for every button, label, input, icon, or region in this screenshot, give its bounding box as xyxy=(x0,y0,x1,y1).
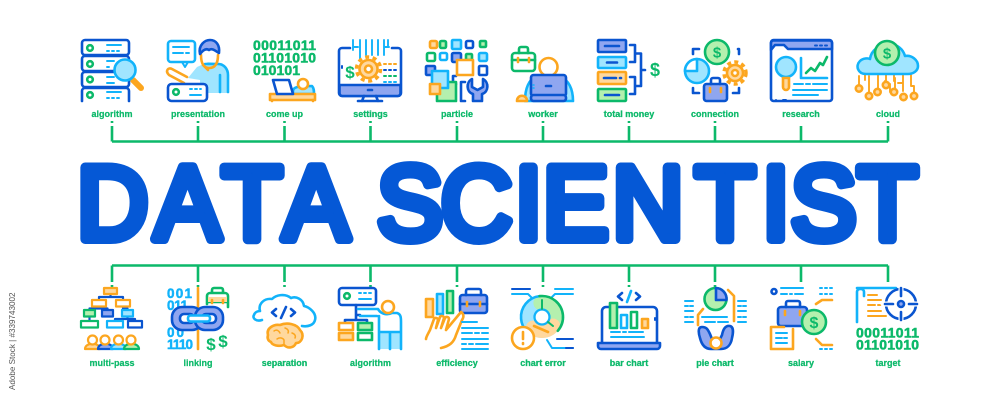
icon: bar chart laptop xyxy=(598,291,660,349)
label: worker: worker xyxy=(527,109,558,119)
icon: connection xyxy=(685,40,746,101)
icon: pie chart person xyxy=(685,288,746,349)
icon: total money stacks xyxy=(598,40,660,101)
icon: connection: $ xyxy=(713,44,722,62)
icon: presentation person xyxy=(167,40,228,101)
icon: salary briefcase: $ xyxy=(810,315,819,332)
label: target: target xyxy=(875,358,901,368)
icon: research window xyxy=(771,40,832,101)
icon: come up binary and laptop: 00011011 xyxy=(253,37,316,53)
label: linking: linking xyxy=(184,358,212,368)
icon: cloud: $ xyxy=(883,46,892,62)
icon: target scroll: 01101010 xyxy=(856,336,919,352)
label: cloud: cloud xyxy=(876,109,900,119)
icon: come up binary and laptop: 01101010 xyxy=(253,50,316,66)
label: presentation: presentation xyxy=(171,109,225,119)
icon: salary briefcase xyxy=(771,288,832,349)
label: particle: particle xyxy=(441,109,473,119)
icon: chart error donut xyxy=(512,289,573,349)
label: pie chart: pie chart xyxy=(696,358,734,368)
icon: multi-pass tree xyxy=(81,288,142,349)
icon: linking chain: $ xyxy=(218,332,228,351)
icon: algorithm person xyxy=(339,288,401,349)
icon: linking chain: 001 xyxy=(167,286,192,301)
watermark id: Adobe Stock | #339743002 xyxy=(8,292,17,390)
label: separation: separation xyxy=(262,358,307,368)
label: algorithm: algorithm xyxy=(350,358,391,368)
icon: linking chain xyxy=(167,286,228,354)
label: multi-pass: multi-pass xyxy=(89,358,135,368)
icon: settings monitor xyxy=(339,40,401,101)
label: research: research xyxy=(782,109,820,119)
icon: come up binary and laptop: 010101 xyxy=(253,62,300,78)
top connector xyxy=(112,121,888,142)
icon: linking chain: 1110 xyxy=(167,337,193,352)
label: come up: come up xyxy=(266,109,304,119)
icon: linking chain: 00 xyxy=(167,325,184,340)
icon: separation cloud and brain xyxy=(253,295,315,347)
icon: algorithm server xyxy=(82,40,141,101)
title: DATA SCIENTIST xyxy=(77,146,918,262)
bottom connector xyxy=(112,266,888,287)
icon: target scroll: 00011011 xyxy=(856,324,919,340)
label: bar chart: bar chart xyxy=(610,358,648,368)
label: connection: connection xyxy=(691,109,739,119)
icon: linking chain: $ xyxy=(206,335,216,354)
label: chart error: chart error xyxy=(520,358,566,368)
icon: target scroll xyxy=(856,286,919,352)
icon: linking chain: 011 xyxy=(167,298,188,313)
icon: total money stacks: $ xyxy=(650,60,660,80)
icon: settings monitor: $ xyxy=(345,63,355,82)
label: settings: settings xyxy=(353,109,388,119)
label: salary: salary xyxy=(788,358,814,368)
icon: particle grid xyxy=(426,40,487,101)
label: algorithm: algorithm xyxy=(91,109,133,119)
label: efficiency: efficiency xyxy=(436,358,478,368)
icon: efficiency hand and bars xyxy=(426,289,488,349)
icon: cloud xyxy=(856,41,918,100)
icon: come up binary and laptop xyxy=(253,37,316,101)
label: total money: total money xyxy=(604,109,654,119)
icon: worker laptop xyxy=(512,47,573,101)
